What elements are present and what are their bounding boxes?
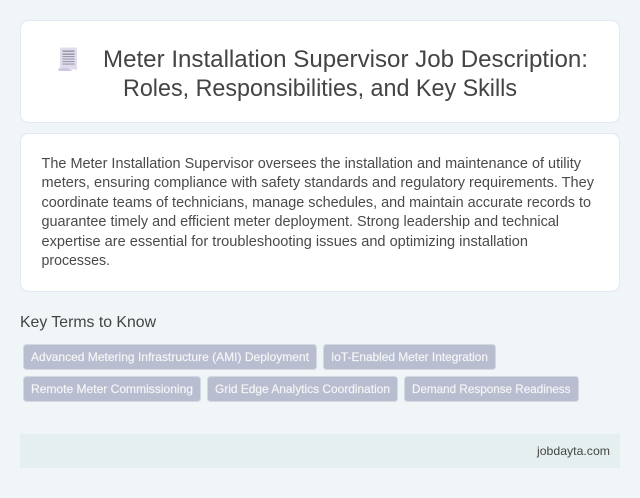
text block: description: The Meter Installation Supervisor oversees the installation and maintenance of utility (42, 156, 582, 172)
heading (103, 46, 588, 102)
tag: grid edge analytics: Grid Edge Analytics Coordination (215, 382, 390, 396)
tag: IoT integration (324, 344, 496, 370)
tag: demand response (404, 376, 578, 402)
text block: description: guarantee timely and efficient meter deployment. Strong leadership and technical (42, 214, 559, 230)
text block: description (42, 156, 595, 269)
heading: key terms: Key Terms to Know (20, 314, 156, 331)
footer source text: jobdayta.com (536, 444, 610, 458)
panel: title card (20, 20, 620, 122)
tag: remote commissioning: Remote Meter Commissioning (31, 382, 193, 396)
text block: description: meters, ensuring compliance with safety standards and regulatory requirements. They (42, 175, 595, 191)
tag: IoT integration: IoT-Enabled Meter Integration (331, 350, 488, 364)
tag: grid edge analytics (208, 376, 398, 402)
heading: Roles, Responsibilities, and Key Skills (123, 75, 517, 102)
heading: Meter Installation Supervisor Job Description: (103, 46, 588, 73)
tag: AMI deployment (24, 344, 316, 370)
text block: description: coordinate teams of technicians, manage schedules, and maintain accurate records to (42, 195, 591, 211)
tag list: key terms (24, 344, 578, 402)
text block: description: processes. (42, 253, 110, 269)
footer bar (20, 434, 620, 468)
text block: description: expertise are essential for troubleshooting issues and optimizing installation (42, 234, 528, 250)
tag: demand response: Demand Response Readiness (412, 382, 570, 396)
icon: document scroll (58, 48, 77, 71)
panel: description (20, 134, 620, 292)
tag: remote commissioning (24, 376, 200, 402)
tag: AMI deployment: Advanced Metering Infrastructure (AMI) Deployment (31, 350, 310, 364)
